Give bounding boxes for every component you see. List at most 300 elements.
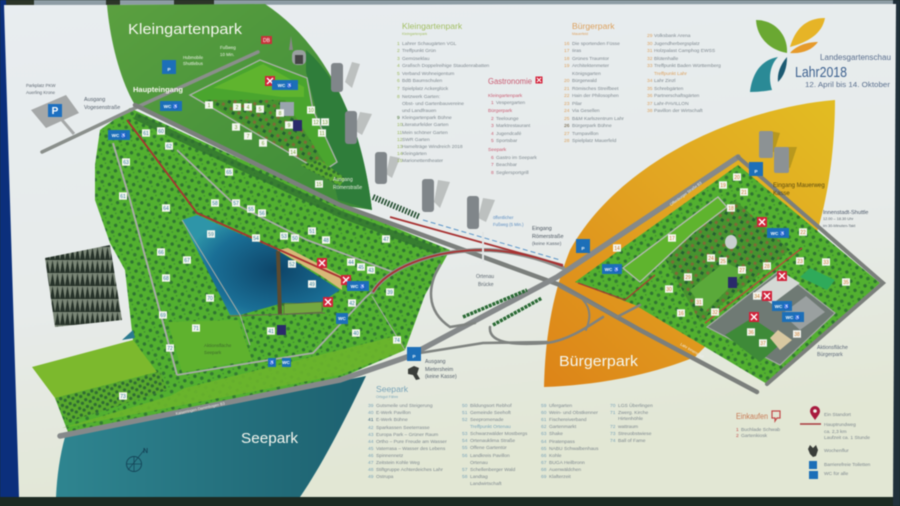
legend: Buergerpark list: 29 [647,33,653,39]
service icons: WC, parking, accessibility: WC [338,316,347,321]
legend: map symbols: Hauptrundweg [824,422,856,428]
number markers: Seepark: 51 [309,229,315,235]
legend: Seepark list [368,384,653,487]
legend: Seepark list: Landkreis Pavillon [470,453,510,459]
map place labels: Shuttlebus [183,61,203,66]
map place labels: Parkplatz PKW [26,83,56,88]
panel: Seepark teal leaf [56,376,366,497]
legend: Seepark list: Landwirtschaft [470,481,502,487]
number markers: Seepark: 72 [167,346,173,352]
legend: Gastronomie list: Vespergarten [496,100,525,106]
legend: Kleingartenpark list: Kleingartenpark [402,32,427,36]
icon: stork [808,445,818,457]
cypress row [373,197,420,217]
number markers: Seepark: 42 [349,301,355,307]
number markers: Seepark: 44 [348,260,354,266]
number markers: Seepark: 56 [259,211,265,217]
legend: Seepark list: Gartenmarkt [549,424,577,430]
number markers: Kleingartenpark: 14 [290,150,296,156]
legend: Buergerpark list: Treffpunkt Lahr [654,71,687,77]
number markers: Kleingartenpark: 10 [308,108,314,114]
beach [277,248,342,290]
lake [182,215,342,316]
legend: Buergerpark list: 27 [564,131,570,137]
legend: Seepark list: Ortho – Pure Freude am Wasser [376,439,447,445]
number markers: Seepark: 71 [193,326,199,332]
number markers: Buergerpark: 21 [741,190,747,196]
legend: Seepark list: 54 [462,438,468,444]
number markers: Kleingartenpark: 1 [208,103,211,109]
number markers: Kleingartenpark: 2 [236,105,239,111]
legend: Kleingartenpark list: Treffpunkt Grün [402,48,436,54]
logo: Landesgartenschau Lahr 2018: Lahr2018 [795,65,847,81]
number markers: Seepark: 63 [123,160,129,166]
legend: Buergerpark list: Turnpavillon [572,131,599,137]
legend: Seepark list: LGS Überlingen [618,402,653,409]
number markers: Buergerpark: 28 [764,264,770,270]
small water inlet [122,330,135,340]
number markers: Kleingartenpark: 13 [322,120,328,126]
legend: Buergerpark list: 21 [564,86,570,92]
legend: Kleingartenpark list: 11 [397,130,402,136]
legend: Gastronomie list: 3 [491,123,494,129]
legend: Gastronomie list: 1 [491,100,494,106]
number markers: Buergerpark: 23 [797,259,803,265]
map place labels: Ausgang [84,97,105,103]
map place labels: Eingang Mauerweg [773,183,825,189]
legend: Kleingartenpark list: Gemüseklau [402,56,430,62]
number markers: Seepark: 59 [208,232,214,238]
legend: Buergerpark list: Schrebgärten [654,86,684,92]
number markers: Seepark: 49 [309,282,315,288]
legend: Seepark list: 56 [462,453,468,459]
legend: Kleingartenpark list: 9 [397,115,400,121]
map place labels: Fußweg [220,45,236,50]
legend: Kleingartenpark list: 14 [397,151,403,157]
legend: Kleingartenpark list: 2 [397,48,400,54]
legend: Kleingartenpark list: 13 [397,144,403,150]
legend: Seepark list: 71 [610,410,616,416]
yellow leaf [790,18,825,47]
number markers: Seepark: 55 [248,207,254,213]
legend: Seepark list: Auenwäldchen [549,467,581,473]
number markers: Seepark: 54 [253,236,259,242]
legend: Gastronomie list: 7 [491,162,494,168]
park paths [113,143,405,375]
map place labels: Offenburger Straße B3 [669,181,703,207]
service icons: WC, parking, accessibility: WC ♿ [605,266,620,273]
legend: Seepark list: 63 [541,431,547,437]
legend: Seepark list: 64 [541,439,547,445]
legend: Seepark list: 73 [610,431,616,437]
icon: shop sign [772,411,780,421]
number markers: Seepark: 43 [368,268,374,274]
panel: Buergerpark yellow-orange leaf [544,100,835,387]
legend: Buergerpark list: Via Gesellen [572,108,600,114]
number markers: Kleingartenpark: 3 [235,125,238,131]
map place labels: öffentlicher [493,215,514,220]
legend: Gastronomie list: 4 [491,131,494,137]
legend: Gastronomie list: Kleingartenpark [488,93,523,99]
legend: Buergerpark list: 36 [647,93,653,99]
legend: Kleingartenpark list: Mein schöner Garten [402,130,448,136]
number markers: Kleingartenpark [205,101,329,188]
icon: stork silhouette on map [408,366,420,380]
map place labels: Mietersheim [425,367,453,373]
number markers: Seepark: 74 [394,338,400,344]
dark blue leaf [778,57,787,82]
logo: Landesgartenschau Lahr 2018: Landesgartenschau [820,53,891,62]
legend: Seepark list: 72 [610,424,616,430]
legend: Seepark list: Kohle [549,453,562,459]
service icons: WC, parking, accessibility: P [167,67,171,72]
legend: Seepark list: Seepromenade [470,417,504,423]
legend: Buergerpark list: 25 [564,116,570,122]
legend: Kleingartenpark list: und Landfrauen [402,108,437,114]
legend: Buergerpark list: 28 [564,138,570,144]
legend: Kleingartenpark list: 4 [397,63,400,69]
legend: Buergerpark list: Die sportenden Füsse [572,41,620,47]
legend: Kleingartenpark list: Literaturfelder Garten [402,122,449,128]
map place labels: Kasse [773,191,790,197]
legend: Gastronomie list [488,76,542,176]
legend: Seepark list: wattraum [618,424,638,430]
legend: Einkaufen: 1 [736,427,739,433]
number markers: Kleingartenpark: 7 [247,134,250,140]
legend: Seepark list: 49 [368,474,374,480]
legend: Gastronomie list: Beachbar [496,162,517,168]
legend: Buergerpark list: Iiras [572,48,582,54]
teal leaf [750,57,778,92]
logo: Landesgartenschau Lahr 2018: 12. April bis 14. Oktober [805,82,891,89]
icon: accessible toilets [809,461,817,469]
legend: Gastronomie list: 6 [491,155,494,161]
legend: Seepark list: 62 [541,424,547,430]
legend: Kleingartenpark list: Kleingartenpark [402,21,463,31]
Kleingartenpark map area [190,60,345,186]
number markers: Seepark: 58 [212,201,218,207]
map place labels: Fußweg (5 Min.) [493,222,524,227]
map place labels: Vogesenstraße [84,105,120,111]
legend: Seepark list: 70 [610,403,616,409]
legend: Gastronomie list: 5 [491,138,494,144]
number markers: Kleingartenpark: 4 [247,105,250,111]
legend: map symbols [800,406,871,479]
legend: Seepark list: Gutsmeile und Steigerung [376,403,433,409]
legend: Seepark list: Schellenberger Wald [470,467,515,473]
panel: Kleingartenpark green leaf [107,4,372,210]
dark green leaf edge [306,50,372,210]
number markers: Buergerpark: 19 [720,183,726,189]
legend: Buergerpark list: Holzpalast Camphog EWSS [654,48,716,54]
map place labels: Innenstadt-Shuttle [823,210,868,216]
logo: Landesgartenschau Lahr 2018 [750,18,891,92]
legend: Seepark list: 43 [368,432,374,438]
number markers: Seepark: 41 [268,329,274,335]
legend: Seepark list: Bildungsort Rebhof [470,403,512,409]
legend: Buergerpark list: 18 [564,56,570,62]
legend: Kleingartenpark list: SWR Garten [402,137,430,143]
legend: Seepark list: Treffpunkt Ortenau [470,424,511,430]
legend: Seepark list: 48 [368,467,374,473]
number markers: Seepark: 61 [120,194,126,200]
number markers: Buergerpark: 27 [739,268,745,274]
icon: compass: N [143,448,148,455]
legend: map symbols: Laufzeit ca. 1 Stunde [824,435,870,441]
green leaf [756,20,787,53]
legend: Gastronomie list: Sportsbar [496,138,518,144]
number markers: Kleingartenpark: 5 [259,107,262,113]
legend: Seepark list: 40 [368,410,374,416]
legend: Kleingartenpark list: BdB Baumschulen [402,78,443,84]
number markers: Seepark: 67 [184,258,190,264]
icon: location pin [810,406,820,420]
legend: Buergerpark list: B&M Karlszentrum Lahr [572,116,624,122]
service icons: WC, parking, accessibility: ♿ [269,359,275,366]
number markers: Buergerpark: 31 [696,300,702,306]
legend: Seepark list: Spinnennetz [376,453,404,459]
tree lines at interchange [463,290,527,317]
map place labels: Hubmobile [183,55,204,60]
number markers: Buergerpark: 34 [754,294,760,300]
icon: restaurant sign [536,76,542,84]
number markers: Seepark: 61 [143,131,149,137]
legend: Seepark list: Gemeinde Seehoft [470,410,511,416]
orchard [55,372,167,422]
legend: map symbols: ca. 2,3 km [824,429,847,435]
legend: Kleingartenpark list: 12 [397,137,403,143]
icon: main route line [800,423,821,425]
number markers: Kleingartenpark: 8 [279,111,282,117]
orange leaf [790,42,818,53]
legend: Seepark list: 61 [541,417,547,423]
legend: Seepark list: 55 [462,445,468,451]
legend: map symbols: Barrierefreie Toiletten [824,462,871,468]
legend: Buergerpark list: Pavillon der Wirtschaft [654,108,703,114]
number markers: Kleingartenpark: 6 [262,141,265,147]
number markers: Buergerpark: 25 [720,259,726,265]
map place labels: Lahr Innenstadt [680,342,705,360]
legend: Buergerpark list: 30 [647,41,653,47]
legend: Buergerpark list: 32 [647,56,653,62]
legend: Kleingartenpark list: 6 [397,78,400,84]
legend: Buergerpark list [564,21,721,144]
legend: Seepark list: E-Werk Pavillon [376,410,411,416]
legend: Buergerpark list: 37 [647,101,653,107]
legend: Seepark list: Zeitstein Kohle Weg [376,460,420,466]
legend: Kleingartenpark list: 10 [397,122,403,128]
legend: Buergerpark list: Treffpunkt Baden Württemberg [654,63,721,69]
legend: Kleingartenpark list: Marionettentheater [402,158,443,164]
parking lot P1: P [52,106,59,117]
map place labels: Kaiserringen-Dammbogen B3 [175,402,225,416]
number markers: Buergerpark: 32 [712,310,718,316]
number markers: Buergerpark: 35 [843,280,849,286]
legend: Gastronomie list: Marktrestaurant [496,123,531,129]
map place labels: Aktionsfläche [817,345,848,351]
service icons: WC, parking, accessibility: WC ♿ [164,103,179,110]
meadow bank along road [62,335,405,428]
legend: Seepark list: Sparkassen Seeterrasse [376,425,430,431]
legend: Kleingartenpark list: Lahrer Schaugärten VGL [402,41,457,47]
legend: map symbols: Ein Standort [824,412,852,418]
legend: Seepark list: 52 [462,417,468,423]
service icons: restaurants [261,36,787,322]
number markers: Buergerpark: 24 [708,256,714,262]
map place labels: Ausgang [425,359,446,365]
service icons: WC, parking, accessibility [108,60,804,367]
legend: Buergerpark list: Bürgerwald [572,78,597,84]
legend: Kleingartenpark list: Kleingartenpark Bühne [402,115,452,121]
legend: Buergerpark list: 23 [564,101,570,107]
map place labels: (keine Kasse) [425,374,457,380]
number markers: Seepark: 73 [120,394,126,400]
service icons: WC, parking, accessibility: WC ♿ [786,314,801,321]
legend: Kleingartenpark list: Obst- und Gartenbauvereine [402,101,464,107]
legend: Buergerpark list: Pilar [572,101,582,107]
legend: Kleingartenpark list: Spielplatz Ackerglück [402,86,449,92]
legend: Seepark list: Ortenauklima Straße [470,438,515,444]
number markers: Buergerpark: 29 [685,275,691,281]
number markers: Buergerpark: 37 [760,341,766,347]
legend: Kleingartenpark list: Hamelträge Windreich 2018 [402,144,463,150]
legend: Gastronomie list: Seglersportgrill [496,170,529,176]
legend: Seepark list: 66 [541,453,547,459]
red main walking route [127,120,563,292]
icon: compass [126,448,148,472]
number markers: Buergerpark: 22 [800,230,806,236]
legend: Buergerpark list: 16 [564,41,570,47]
legend: Seepark list: Schwarzwälder Mostbergs [470,431,528,437]
legend: Seepark list: Landtag [470,474,488,480]
Buergerpark map area [575,165,880,384]
number markers: Kleingartenpark: 12 [313,120,319,126]
legend: Seepark list: 47 [368,460,374,466]
legend: Buergerpark list: Königsgarten [572,71,601,77]
legend: map symbols: WC für alle [824,471,848,477]
number markers: Seepark: 66 [158,250,164,256]
legend: Kleingartenpark list: 7 [397,86,400,92]
map place labels: (keine Kasse) [532,241,562,247]
legend: Buergerpark list: 31 [647,48,653,54]
number markers: Seepark: 53 [281,234,287,240]
number markers: Seepark: 52 [289,262,295,268]
conifer forest [45,245,122,327]
heading: Kleingartenpark: Kleingartenpark [128,21,243,38]
legend: Buergerpark list: Bürgerpark [572,21,615,31]
legend: Kleingartenpark list [397,21,490,164]
number markers: Seepark: 57 [233,201,239,207]
legend: Kleingartenpark list: Netzwerk Garten: [402,94,440,100]
legend: Buergerpark list: 35 [647,86,653,92]
legend: Gastronomie list: Gastronomie [488,76,532,86]
number markers: Seepark [119,127,401,400]
legend: Seepark list: 69 [541,474,547,480]
legend: Buergerpark list: 17 [564,48,570,54]
legend: Gastronomie list: Bürgerpark [488,108,513,114]
number markers: Seepark: 65 [226,170,232,176]
lower-left meadow field [32,340,157,398]
legend: Seepark list: Ortsgut Fähre [376,395,398,399]
legend: Gastronomie list: Teelounge [496,116,519,122]
number markers: Seepark: 60 [158,129,164,135]
service icons: WC, parking, accessibility: WC ♿ [112,132,127,139]
legend: Buergerpark list: Volksbank Arena [654,33,691,39]
legend: Buergerpark list: 33 [647,63,653,69]
number markers: Seepark: 64 [163,206,169,212]
legend: Buergerpark list: Hain der Philosophen [572,93,619,99]
legend: Gastronomie list: Jugendcafé [496,131,522,137]
legend: Seepark list: Klafterzeit [549,474,571,480]
legend: Einkaufen: Buchlade Schwab [741,427,780,433]
legend: Buergerpark list: Mauerfeld [572,32,588,36]
legend: Einkaufen [736,411,780,439]
number markers: Buergerpark: 14 [614,246,620,252]
parking lot P1 [31,95,79,134]
legend: Buergerpark list: Jugendherbergsplatz [654,41,700,47]
map place labels: Seepark [204,350,222,355]
map place labels: im 30-Minuten-Takt [823,224,856,228]
towers [331,62,797,229]
number markers: Seepark: 40 [353,331,359,337]
legend: Kleingartenpark list: 3 [397,56,400,62]
legend: Seepark list: 74 [610,438,616,444]
map place labels: Auerling Krone [26,90,56,95]
heading: Seepark: Seepark [241,430,299,447]
map place labels: Eingang [532,226,552,232]
legend: Seepark list: Ostrupa [376,474,394,480]
legend: Seepark list: Vaterrasa – Wasser des Lebens [376,446,446,452]
legend: Seepark list: Stiftgruppe Achterdeiches Lahr [376,467,443,473]
legend: Buergerpark list: Römisches Streifbeet [572,86,619,92]
public footpath dashes [423,220,560,260]
map place labels: Bürgerpark [817,352,843,358]
legend: Buergerpark list: Lahr-PAVILLON [654,101,689,107]
service icons: WC, parking, accessibility: P [754,169,758,174]
legend: Seepark list: 57 [462,467,468,473]
main roads [42,52,883,436]
map place labels: Römerstraße [333,185,362,191]
legend: Kleingartenpark list: 8 [397,94,400,100]
legend: Seepark list: 65 [541,446,547,452]
legend: Buergerpark list: Architektenmeter [572,63,609,69]
legend: Kleingartenpark list: Grafisch Doppelreihige Staudenrabatten [402,63,490,69]
legend: Kleingartenpark list: 5 [397,71,400,77]
heading: Buergerpark: Bürgerpark [559,353,639,370]
legend: Seepark list: Hirtenhöhle [618,416,643,422]
map place labels: Haupteingang [133,87,183,94]
service icons: WC, parking, accessibility: WC ♿ [771,230,786,237]
Ortenau bridge pylon [482,232,484,262]
map place labels: Aktionsfläche [204,343,232,348]
legend: Kleingartenpark list: Verband Wohneigentum [402,71,454,77]
Aktionsflaeche Seepark lawn [168,320,252,372]
legend: Seepark list: 46 [368,453,374,459]
legend: Gastronomie list: Seepark [488,147,507,153]
number markers: Seepark: 39 [387,290,393,296]
number markers: Buergerpark: 36 [748,330,754,336]
service icons: WC, parking, accessibility: WC ♿ [278,82,293,89]
number markers: Seepark: 62 [166,144,172,150]
legend: Buergerpark list: Spielplatz Mauerfeld [572,138,617,144]
number markers: Buergerpark: 17 [669,236,675,242]
legend: Gastronomie list: 2 [491,116,494,122]
legend: Seepark list: 51 [462,410,468,416]
service icons: WC, parking, accessibility: WC ♿ [775,303,790,310]
service icons: WC, parking, accessibility: P [412,354,416,359]
legend: Kleingartenpark list: 15 [397,158,403,164]
legend: Seepark list: Ufergarten [549,403,572,409]
